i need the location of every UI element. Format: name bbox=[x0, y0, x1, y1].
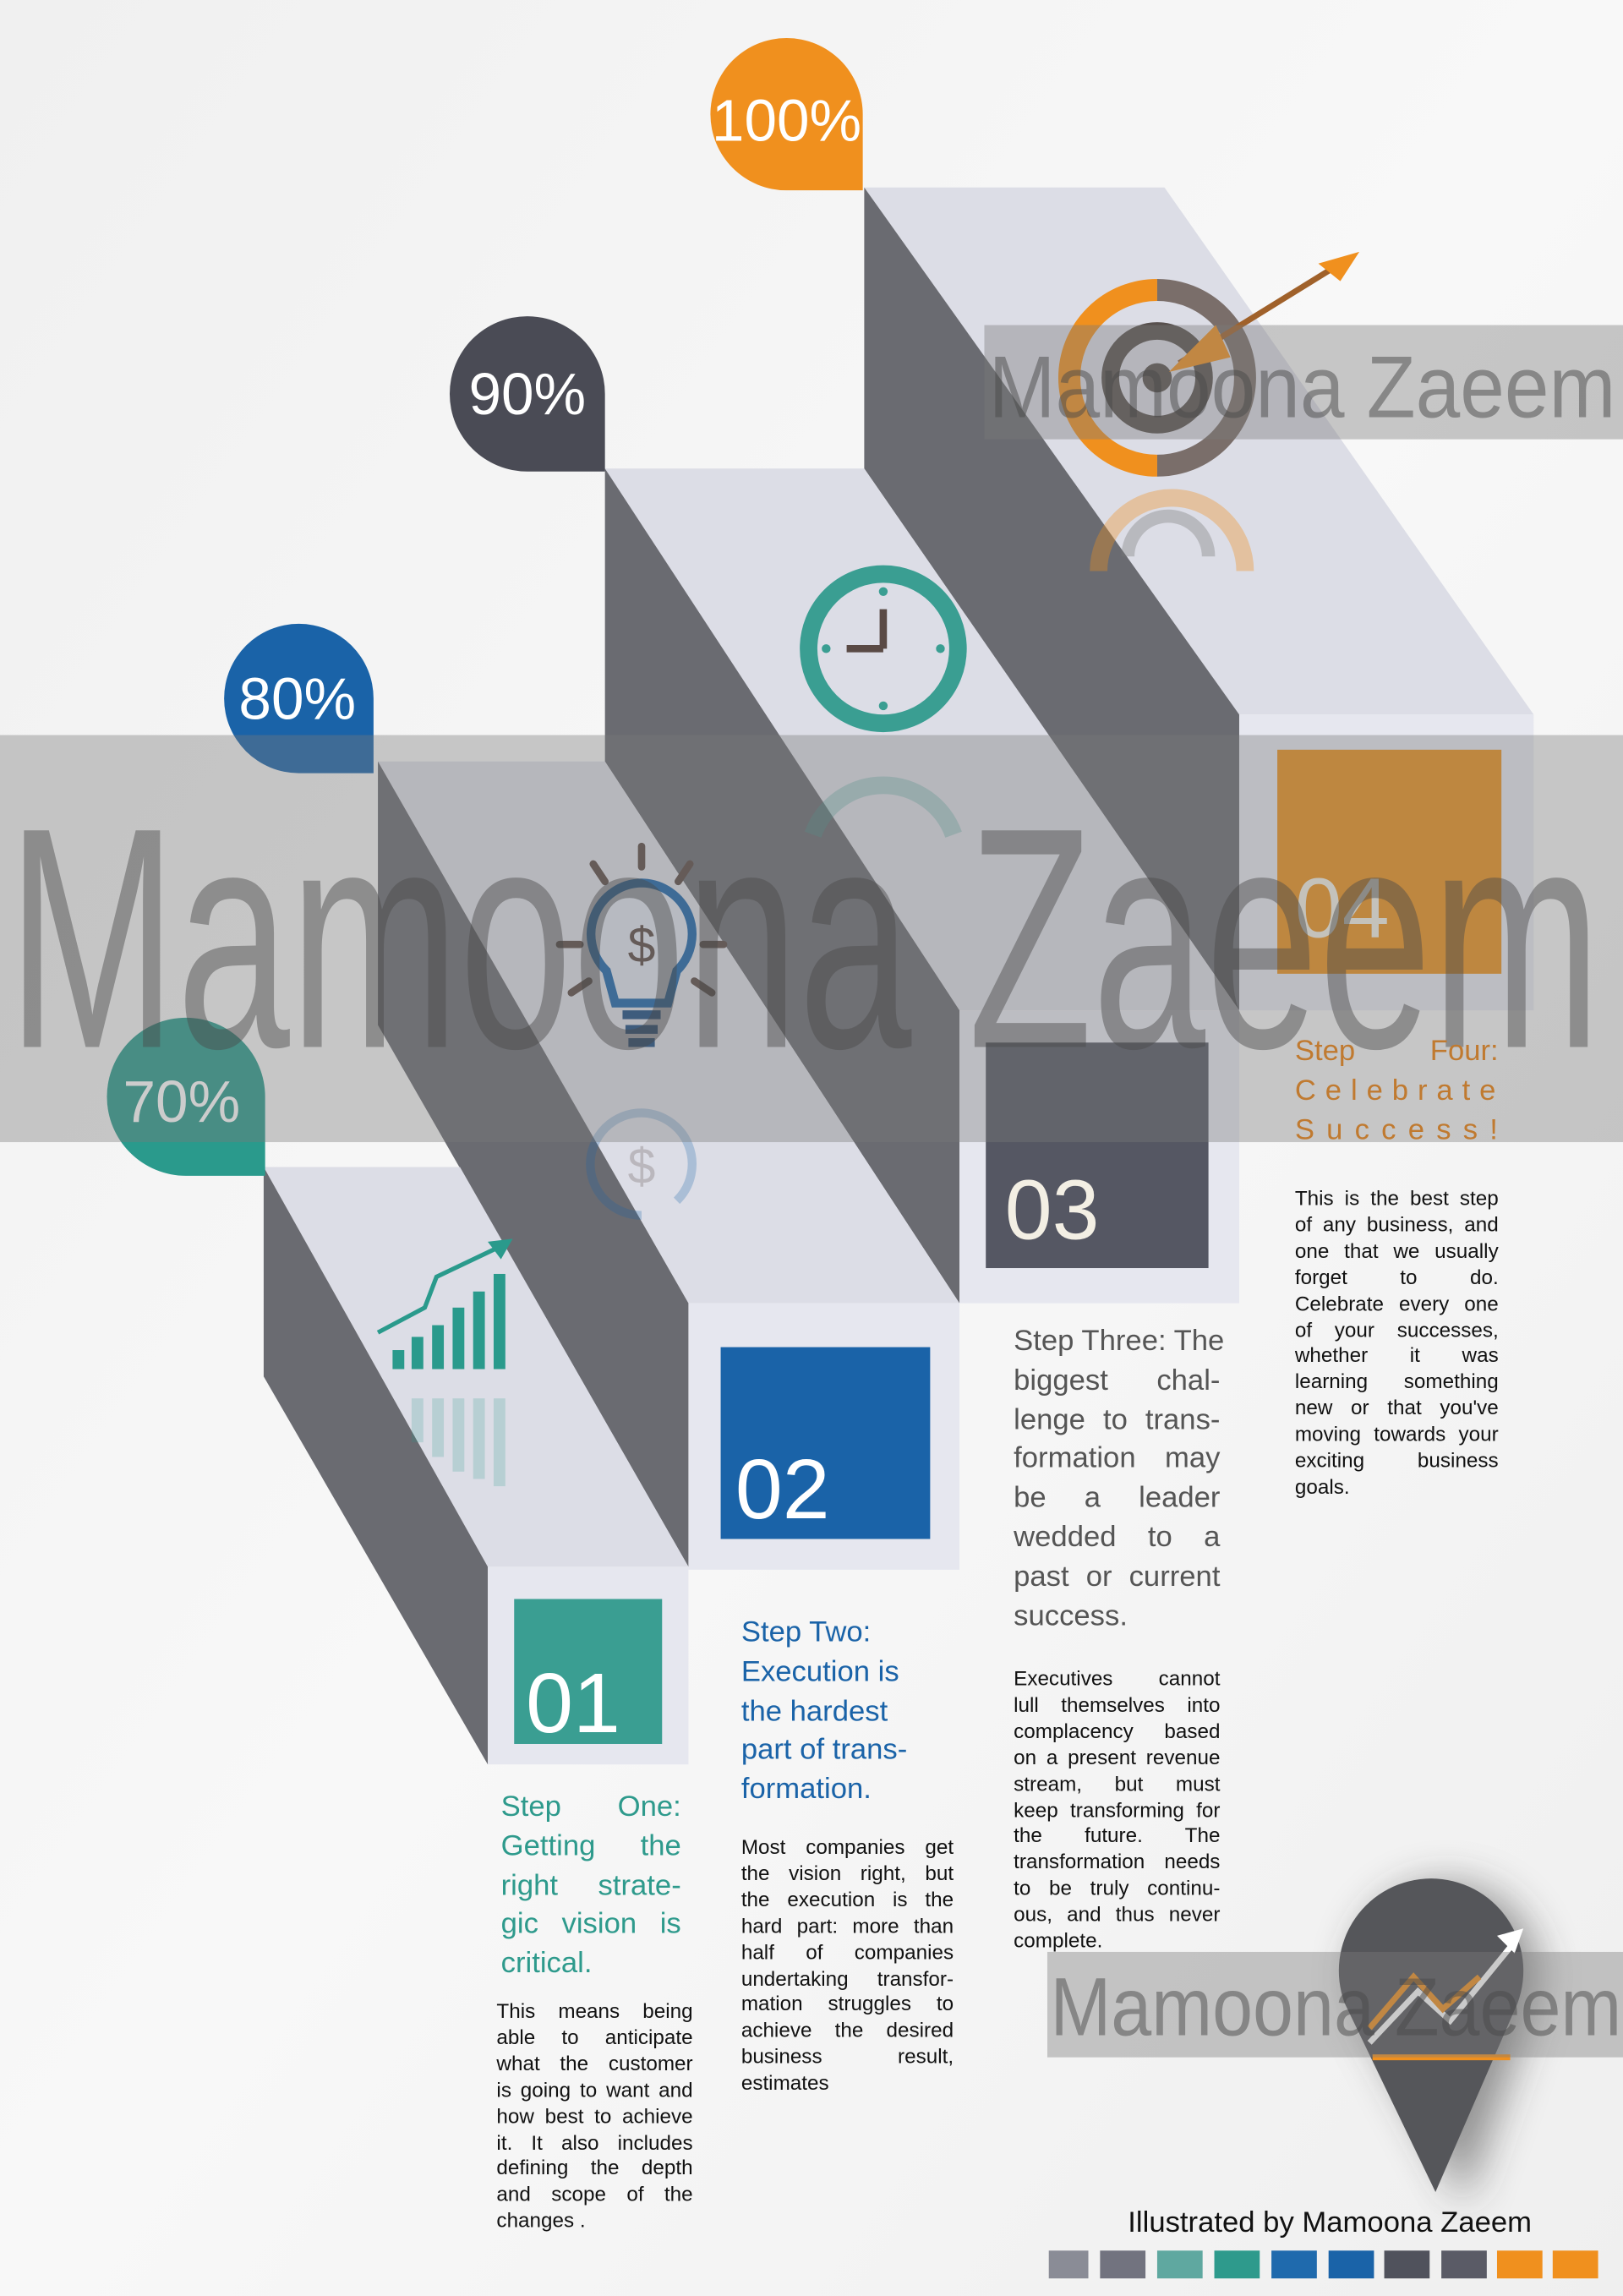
step three body: to be truly continu- bbox=[1014, 1876, 1220, 1900]
step two body: achieve the desired bbox=[741, 2018, 954, 2042]
step four body: goals. bbox=[1295, 1474, 1350, 1498]
step numbers bbox=[526, 861, 1390, 1751]
step two body: business result, bbox=[741, 2045, 954, 2068]
color swatches bbox=[1049, 2250, 1598, 2278]
step four heading: Success! bbox=[1295, 1113, 1510, 1146]
step one heading bbox=[501, 1790, 681, 1980]
step three body: transformation needs bbox=[1014, 1850, 1220, 1873]
step two heading: part of trans- bbox=[741, 1735, 907, 1767]
bubble 70 bbox=[107, 1018, 265, 1176]
step four body: of any business, and bbox=[1295, 1212, 1499, 1236]
step three heading: wedded to a bbox=[1014, 1522, 1220, 1554]
step four body bbox=[1295, 1186, 1499, 1498]
step one heading: critical. bbox=[501, 1948, 592, 1980]
step two body: the vision right, but bbox=[741, 1861, 954, 1884]
pin icon bbox=[1339, 1878, 1538, 2204]
step two heading: Execution is bbox=[741, 1656, 899, 1688]
step two heading bbox=[741, 1616, 907, 1806]
bubble 100: 100% bbox=[712, 87, 861, 153]
step two body: the execution is the bbox=[741, 1887, 954, 1911]
step two body: hard part: more than bbox=[741, 1913, 954, 1937]
bubble 90 bbox=[450, 316, 605, 472]
step four body: whether it was bbox=[1295, 1343, 1499, 1367]
step three heading: lenge to trans- bbox=[1014, 1403, 1220, 1436]
step four body: one that we usually bbox=[1295, 1238, 1499, 1262]
step four heading: Step Four: bbox=[1295, 1036, 1499, 1068]
step two heading: Step Two: bbox=[741, 1616, 871, 1648]
step one heading: Getting the bbox=[501, 1830, 681, 1862]
step one body: This means being bbox=[496, 1998, 693, 2022]
step four body: learning something bbox=[1295, 1369, 1499, 1393]
step numbers: 03 bbox=[1005, 1162, 1100, 1257]
icon: target bbox=[1069, 252, 1359, 571]
step three body: keep transforming for bbox=[1014, 1797, 1220, 1821]
step four body: moving towards your bbox=[1295, 1422, 1499, 1446]
step 3 bbox=[605, 468, 1239, 1304]
step two heading: formation. bbox=[741, 1774, 872, 1806]
step one body: able to anticipate bbox=[496, 2025, 693, 2048]
step four heading: Celebrate bbox=[1295, 1074, 1505, 1107]
step one body: it. It also includes bbox=[496, 2129, 693, 2153]
step three heading: formation may bbox=[1014, 1443, 1220, 1475]
step three body: the future. The bbox=[1014, 1823, 1220, 1847]
step 4 bbox=[864, 188, 1533, 1010]
step two body: estimates bbox=[741, 2071, 829, 2094]
icon: chart bbox=[378, 1238, 512, 1486]
step three body: Executives cannot bbox=[1014, 1666, 1220, 1690]
bubble 80: 80% bbox=[238, 665, 356, 731]
step one heading: right strate- bbox=[501, 1869, 681, 1901]
step three body: lull themselves into bbox=[1014, 1692, 1220, 1716]
step four body: new or that you've bbox=[1295, 1396, 1499, 1419]
step three heading: past or current bbox=[1014, 1561, 1220, 1593]
step two body: mation struggles to bbox=[741, 1992, 954, 2015]
step three body: on a present revenue bbox=[1014, 1745, 1220, 1768]
step three body: stream, but must bbox=[1014, 1771, 1220, 1795]
step one body: how best to achieve bbox=[496, 2103, 693, 2127]
step two heading: the hardest bbox=[741, 1695, 888, 1727]
step three heading: success. bbox=[1014, 1599, 1128, 1632]
icon: bulb: $ bbox=[628, 918, 655, 973]
step four body: Celebrate every one bbox=[1295, 1291, 1499, 1315]
step three body bbox=[1014, 1666, 1221, 1952]
step three body: ous, and thus never bbox=[1014, 1902, 1220, 1926]
step two body: undertaking transfor- bbox=[741, 1965, 954, 1989]
bubble 90: 90% bbox=[468, 361, 586, 427]
step 2 bbox=[378, 762, 959, 1570]
bubble 70: 70% bbox=[123, 1069, 240, 1134]
bubble 80 bbox=[224, 624, 374, 774]
step four body: forget to do. bbox=[1295, 1265, 1499, 1288]
step one body: what the customer bbox=[496, 2051, 693, 2075]
step two body: half of companies bbox=[741, 1939, 954, 1963]
step four body: This is the best step bbox=[1295, 1186, 1499, 1210]
step three body: complacency based bbox=[1014, 1719, 1220, 1742]
step three heading: be a leader bbox=[1014, 1482, 1220, 1514]
icon: clock bbox=[809, 574, 958, 834]
step four body: of your successes, bbox=[1295, 1317, 1499, 1341]
step one body: defining the depth bbox=[496, 2156, 693, 2179]
step four body: exciting business bbox=[1295, 1448, 1499, 1472]
step one body: and scope of the bbox=[496, 2182, 693, 2206]
step three heading: Step Three: The bbox=[1014, 1326, 1224, 1358]
credit: Illustrated by Mamoona Zaeem bbox=[1128, 2206, 1532, 2239]
step three heading bbox=[1014, 1326, 1224, 1632]
icon: bulb bbox=[560, 846, 724, 1216]
step numbers: 02 bbox=[735, 1442, 830, 1537]
step one body: changes . bbox=[496, 2208, 586, 2232]
step numbers: 01 bbox=[526, 1656, 620, 1751]
step one body bbox=[496, 1998, 693, 2232]
step four heading bbox=[1295, 1036, 1510, 1146]
icon: bulb: $ bbox=[628, 1140, 655, 1194]
step numbers: 04 bbox=[1295, 861, 1390, 956]
step 1 bbox=[264, 1167, 688, 1764]
step two body bbox=[741, 1834, 954, 2094]
step three heading: biggest chal- bbox=[1014, 1364, 1220, 1397]
bubble 100 bbox=[710, 38, 863, 190]
step two body: Most companies get bbox=[741, 1834, 954, 1858]
step one body: is going to want and bbox=[496, 2077, 693, 2101]
step one heading: Step One: bbox=[501, 1790, 681, 1823]
step one heading: gic vision is bbox=[501, 1909, 681, 1941]
step three body: complete. bbox=[1014, 1928, 1102, 1952]
